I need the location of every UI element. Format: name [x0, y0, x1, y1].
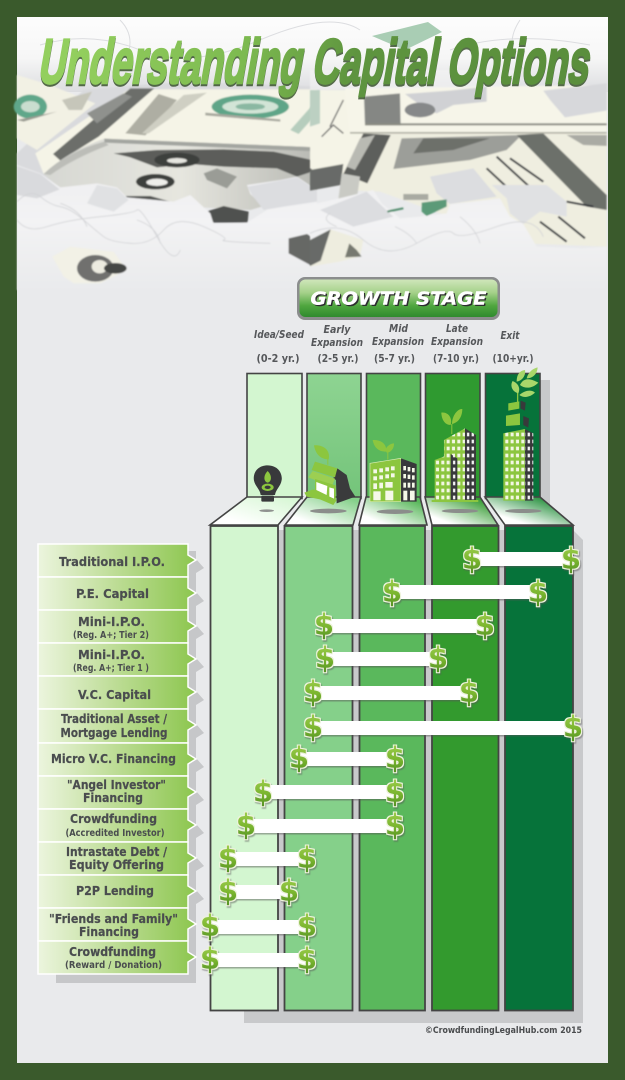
row: Micro V.C. Financing: Micro V.C. Financing: [51, 752, 176, 766]
lower stage columns: [210, 526, 573, 1010]
range bars with dollar markers: [200, 542, 583, 976]
bar: V.C. Capital: [303, 675, 479, 709]
row: Friends and Family Financing: Financing: [79, 925, 139, 939]
bar: Crowdfunding Reward: $: [297, 942, 317, 976]
growth stage button: [297, 277, 500, 320]
bar: V.C. Capital: $: [459, 675, 479, 709]
bar: P.E. Capital: $: [528, 575, 548, 609]
row: P2P Lending: [38, 875, 196, 908]
icon: tall tower with plant: [503, 367, 542, 513]
stage labels: Expansion: [431, 336, 483, 348]
row: Mini-I.P.O. Tier 2: Mini-I.P.O.: [78, 615, 145, 629]
bar: Intrastate: $: [218, 841, 238, 875]
bar: Crowdfunding Reward: [200, 942, 317, 976]
row: Crowdfunding Reward / Donation: Crowdfunding: [69, 945, 156, 959]
stage labels: Expansion: [372, 336, 424, 348]
bar: P2P Lending: $: [218, 874, 238, 908]
bar: Intrastate: $: [297, 841, 317, 875]
bar: P2P Lending: [218, 874, 299, 908]
row: Mini-I.P.O. Tier 2: (Reg. A+; Tier 2): [73, 630, 149, 641]
right half of photo: [310, 70, 607, 290]
row: Friends and Family Financing: [38, 908, 196, 941]
stage labels: (0-2 yr.): [256, 353, 300, 365]
bar: Micro V.C. Financing: $: [385, 741, 405, 775]
bar: Micro V.C. Financing: [289, 741, 405, 775]
bar: V.C. Capital: $: [303, 675, 323, 709]
row: Crowdfunding Accredited Investor: (Accredited Investor): [66, 828, 164, 839]
icon: office building: [370, 440, 417, 514]
bar: Mini-I.P.O. Tier 2: $: [475, 608, 495, 642]
row: Micro V.C. Financing: [38, 743, 196, 776]
upper stage columns: [247, 374, 540, 498]
row: Angel Investor Financing: Financing: [83, 791, 143, 805]
row: Mini-I.P.O. Tier 1: [38, 643, 196, 676]
bar: Angel Investor: $: [385, 775, 405, 809]
copyright footer: ©CrowdfundingLegalHub.com 2015: [425, 1026, 582, 1036]
stage labels: Exit: [500, 330, 520, 342]
bar: Mini-I.P.O. Tier 1: $: [315, 641, 335, 675]
row: P.E. Capital: P.E. Capital: [76, 587, 149, 601]
row: Mini-I.P.O. Tier 2: [38, 610, 196, 643]
row: Traditional Asset / Mortgage Lending: Traditional Asset /: [61, 712, 168, 726]
stage icons: [254, 367, 542, 514]
stage labels: Early: [324, 324, 352, 336]
bar: P.E. Capital: [382, 575, 548, 609]
row: P2P Lending: P2P Lending: [76, 884, 154, 898]
stage labels: Mid: [389, 323, 408, 335]
row: Crowdfunding Accredited Investor: [38, 809, 196, 842]
row: Crowdfunding Reward / Donation: [38, 941, 196, 974]
row labels panel: [38, 544, 204, 983]
stage labels: Expansion: [311, 337, 363, 349]
bar: Friends and Family: $: [297, 909, 317, 943]
bar: Traditional I.P.O.: [462, 542, 581, 576]
row: Angel Investor Financing: "Angel Investor": [67, 778, 166, 792]
bar: Angel Investor: [253, 775, 405, 809]
growth stage button: GROWTH STAGE: [312, 290, 489, 311]
row: V.C. Capital: [38, 676, 196, 709]
bar: Traditional Asset / Mortgage Lending: [303, 710, 583, 744]
bar: Crowdfunding Accredited: $: [385, 808, 405, 842]
stage labels: (5-7 yr.): [374, 353, 415, 365]
bar: Mini-I.P.O. Tier 1: $: [428, 641, 448, 675]
row: P.E. Capital: [38, 577, 196, 610]
stage labels: (10+yr.): [492, 353, 534, 365]
row: Traditional I.P.O.: Traditional I.P.O.: [59, 555, 165, 569]
icon: lightbulb: [254, 465, 282, 512]
row: Traditional Asset / Mortgage Lending: [38, 709, 196, 743]
row: Crowdfunding Accredited Investor: Crowdfunding: [70, 812, 157, 826]
row: Crowdfunding Reward / Donation: (Reward / Donation): [65, 960, 162, 971]
growth stage button: GROWTH STAGE: [310, 288, 487, 310]
stage labels: Idea/Seed: [254, 329, 304, 341]
bar: P2P Lending: $: [279, 874, 299, 908]
row: Friends and Family Financing: "Friends and Family": [49, 912, 178, 926]
bar: Friends and Family: [200, 909, 317, 943]
bar: Micro V.C. Financing: $: [289, 741, 309, 775]
photo: dollar bills and puzzle pieces: [14, 17, 608, 290]
row: Traditional I.P.O.: [38, 544, 196, 577]
row: Intrastate Debt / Equity Offering: Intrastate Debt /: [66, 845, 168, 859]
column shadow: [244, 380, 583, 1023]
bar: Intrastate: [218, 841, 317, 875]
row: V.C. Capital: V.C. Capital: [78, 688, 151, 702]
bar: Crowdfunding Accredited: $: [236, 808, 256, 842]
row: Angel Investor Financing: [38, 776, 196, 809]
bar: Traditional Asset / Mortgage Lending: $: [303, 710, 323, 744]
bar: Mini-I.P.O. Tier 1: [315, 641, 448, 675]
row: Traditional Asset / Mortgage Lending: Mortgage Lending: [60, 726, 168, 740]
row: Intrastate Debt / Equity Offering: Equity Offering: [69, 858, 164, 872]
bar: Traditional I.P.O.: $: [561, 542, 581, 576]
bar: Traditional Asset / Mortgage Lending: $: [563, 710, 583, 744]
bar: Crowdfunding Accredited: [236, 808, 405, 842]
bar: Mini-I.P.O. Tier 2: $: [314, 608, 334, 642]
platform tops: [210, 497, 573, 525]
bar: P.E. Capital: $: [382, 575, 402, 609]
left half of photo: [14, 75, 317, 290]
stage labels: (7-10 yr.): [433, 353, 479, 365]
row: Mini-I.P.O. Tier 1: (Reg. A+; Tier 1 ): [73, 663, 149, 674]
bar: Mini-I.P.O. Tier 2: [314, 608, 495, 642]
stage labels: (2-5 yr.): [318, 353, 358, 365]
stage labels: Late: [446, 323, 468, 335]
stage labels: [254, 323, 534, 365]
bar: Friends and Family: $: [200, 909, 220, 943]
bar: Angel Investor: $: [253, 775, 273, 809]
row: Intrastate Debt / Equity Offering: [38, 842, 196, 875]
icon: two towers: [432, 409, 478, 513]
bar: Crowdfunding Reward: $: [200, 942, 220, 976]
row: Mini-I.P.O. Tier 1: Mini-I.P.O.: [78, 648, 145, 662]
bar: Traditional I.P.O.: $: [462, 542, 482, 576]
label shadows: [56, 551, 204, 983]
icon: shop: [304, 445, 355, 513]
